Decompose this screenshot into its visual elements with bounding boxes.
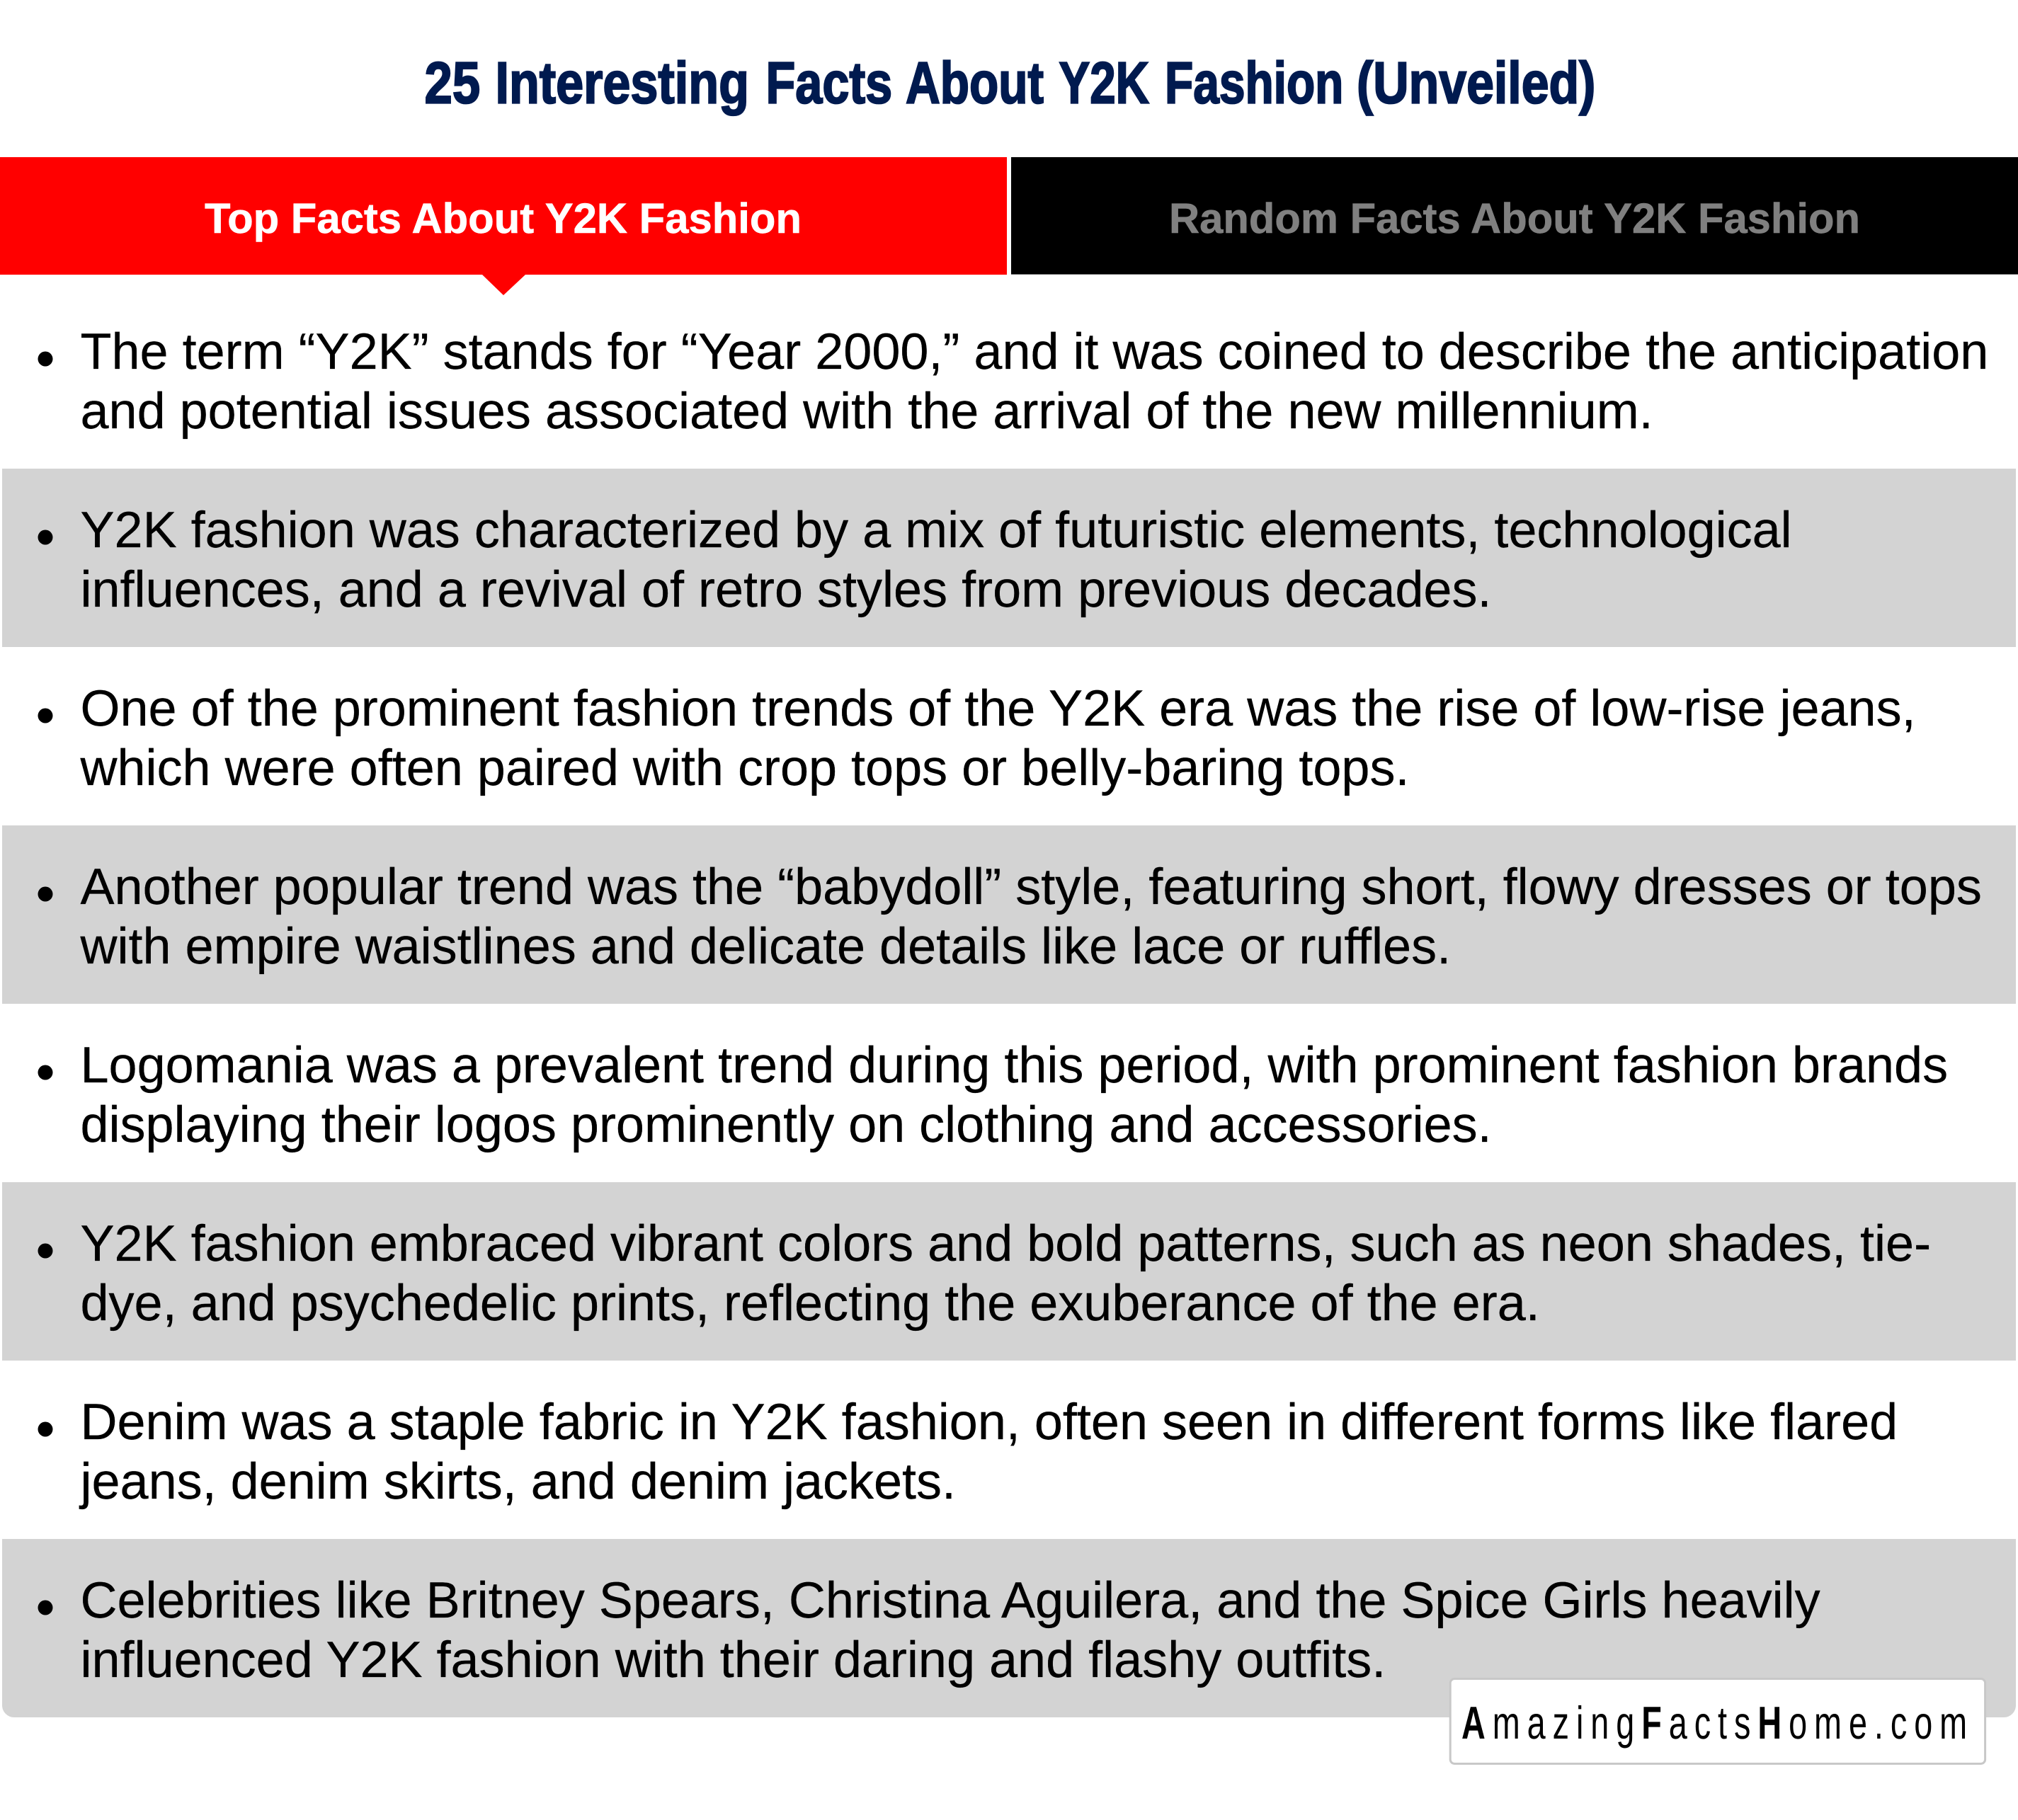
fact row 3: One of the prominent fashion trends of the Y2K era was the rise of low-rise jeans, <box>81 680 1916 737</box>
fact row 5 <box>38 1037 1948 1153</box>
fact row 5: Logomania was a prevalent trend during this period, with prominent fashion brands <box>81 1037 1948 1094</box>
title: Fashion <box>1165 50 1343 116</box>
fact row 1: The term “Y2K” stands for “Year 2000,” and it was coined to describe the anticipation <box>81 324 1988 380</box>
fact row 4 <box>2 825 2016 1004</box>
fact row 6: Y2K fashion embraced vibrant colors and bold patterns, such as neon shades, tie- <box>81 1215 1931 1272</box>
fact row 6: dye, and psychedelic prints, reflecting the exuberance of the era. <box>81 1275 1540 1332</box>
title: 25 <box>425 50 480 116</box>
tab: top facts (active) <box>0 157 1007 295</box>
title: Facts <box>766 50 892 116</box>
tab: top facts (active): Top Facts About Y2K Fashion <box>205 195 802 242</box>
watermark: AmazingFactsHome.com <box>1450 1679 1985 1764</box>
fact row 7 <box>38 1394 1898 1510</box>
fact row 8: Celebrities like Britney Spears, Christina Aguilera, and the Spice Girls heavily <box>81 1572 1820 1629</box>
fact row 7: Denim was a staple fabric in Y2K fashion, often seen in different forms like flared <box>81 1394 1898 1450</box>
tab: random facts (inactive): Random Facts About Y2K Fashion <box>1169 195 1860 242</box>
title: Y2K <box>1059 50 1149 116</box>
fact row 4: Another popular trend was the “babydoll” style, featuring short, flowy dresses or tops <box>81 859 1982 915</box>
fact row 7: jeans, denim skirts, and denim jackets. <box>79 1453 956 1510</box>
title: About <box>906 50 1044 116</box>
fact row 4: with empire waistlines and delicate details like lace or ruffles. <box>79 918 1451 975</box>
fact row 6 <box>2 1182 2016 1361</box>
fact row 1 <box>38 324 1988 440</box>
watermark: AmazingFactsHome.com: AmazingFactsHome.com <box>1461 1697 1974 1749</box>
fact row 3: which were often paired with crop tops or belly-baring tops. <box>79 740 1409 796</box>
fact row 8 <box>2 1539 2016 1717</box>
fact row 2: Y2K fashion was characterized by a mix of futuristic elements, technological <box>81 502 1792 559</box>
fact row 3 <box>38 680 1916 796</box>
fact row 8: influenced Y2K fashion with their daring and flashy outfits. <box>81 1632 1386 1688</box>
tab: random facts (inactive) <box>1011 157 2018 275</box>
title: Interesting <box>496 50 749 116</box>
title <box>425 50 1595 116</box>
title: (Unveiled) <box>1357 50 1595 116</box>
fact row 5: displaying their logos prominently on clothing and accessories. <box>81 1097 1492 1153</box>
fact row 2: influences, and a revival of retro styles from previous decades. <box>81 561 1491 618</box>
fact row 1: and potential issues associated with the arrival of the new millennium. <box>81 383 1653 440</box>
fact row 2 <box>2 469 2016 647</box>
